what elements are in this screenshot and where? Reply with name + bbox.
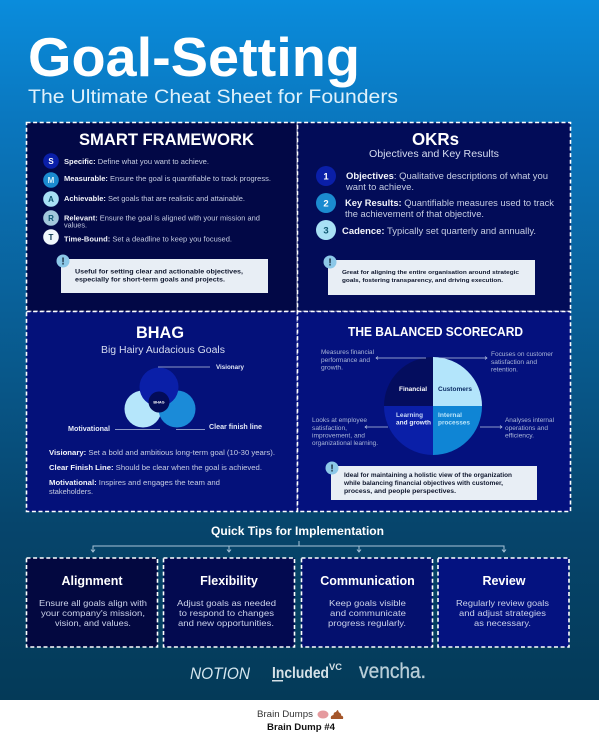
callout: balanced scorecard [326,462,537,500]
panel: review tip: Review [482,574,526,588]
footer: Brain Dump #4 [267,722,335,732]
icon: number 3: 3 [323,226,329,236]
panel: alignment tip: vision, and values. [55,618,131,628]
panel: review tip: as necessary. [474,618,531,628]
text: Key Results: the achievement of that objective. [345,209,484,219]
callout: SMART: Useful for setting clear and actionable objectives, [75,268,243,276]
text: Measurable: Measurable: Ensure the goal is quantifiable to track progress. [64,176,271,183]
panel: alignment tip [26,558,158,647]
heading: BHAG: BHAG [136,323,184,342]
icon: S badge [43,153,59,169]
pie chart: Internal [438,413,462,419]
panel: balanced scorecard [298,312,570,512]
text: Objectives: want to achieve. [345,182,414,192]
icon: T badge: T [49,233,54,242]
logo: Included VC: VC [329,662,343,672]
panel: alignment tip: Alignment [61,574,123,588]
callout: SMART: especially for short-term goals and projects. [75,277,225,284]
text: Specific: Specific: Define what you want to achieve. [64,159,209,166]
arrow: internal processes [480,426,502,428]
text: Relevant [64,216,260,230]
icon: M badge: M [48,176,55,185]
subheading: OKRs: Objectives and Key Results [369,149,499,160]
note: learning and growth: organizational learning. [312,440,378,447]
note: customers: satisfaction and [491,359,538,366]
callout: SMART: ! [61,256,65,268]
text: Cadence: Cadence: Typically set quarterly and annually. [342,226,536,236]
icon: M badge [43,172,59,188]
note: learning and growth: satisfaction, [312,425,347,432]
logo: Included VC: Included [272,665,329,682]
callout: balanced scorecard: ! [330,464,334,474]
logo: vencha: vencha. [359,660,426,683]
icon: brain [318,710,328,718]
note: customers: retention. [491,366,518,374]
panel: communication tip: progress regularly. [328,618,406,628]
callout: OKRs: ! [328,258,332,268]
subtitle: The Ultimate Cheat Sheet for Founders [28,86,398,108]
note: financial: performance and [321,357,371,364]
text: Motivational: stakeholders. [49,489,93,496]
subheading: BHAG: Big Hairy Audacious Goals [101,345,225,356]
arrow: learning and growth [365,426,388,428]
panel: flexibility tip [164,558,294,647]
title: Goal-Setting [28,26,360,88]
callout: SMART [56,254,268,293]
text: Motivational: Motivational: Inspires and engages the team and [49,480,220,487]
icon: R badge: R [48,214,54,223]
note: learning and growth: improvement, and [312,432,366,440]
icon: A badge [43,191,59,207]
panel: communication tip: Keep goals visible [329,598,406,608]
panel: alignment tip: your company's mission, [41,608,145,618]
note: internal processes: efficiency. [505,432,534,440]
text: Key Results [345,198,555,219]
panel: review tip [438,558,569,647]
callout: OKRs [324,256,535,295]
pie chart [384,357,482,455]
arrow: financial [376,356,426,360]
pie chart: and growth [396,420,431,426]
icon: number 1 [316,166,336,186]
pie chart: Customers [438,387,473,393]
text: Key Results: Key Results: Quantifiable measures used to track [345,198,555,208]
icon: number 2: 2 [323,198,329,210]
note: financial: growth. [321,364,343,372]
pie chart: Financial [399,387,427,393]
panel: communication tip: and communicate [330,608,406,618]
panel: communication tip: Communication [320,574,415,588]
text: Time-Bound: Time-Bound: Set a deadline to keep you focused. [64,236,232,244]
panel: flexibility tip: and new opportunities. [178,618,274,628]
icon: A badge: A [48,195,54,204]
icon: number 1: 1 [323,172,329,182]
text: Objectives: Objectives : Qualitative descriptions of what you [346,171,548,181]
icon: poo [331,710,343,719]
label: Visionary: Visionary [216,365,245,371]
panel: flexibility tip: to respond to changes [179,608,274,618]
panel: flexibility tip: Flexibility [200,574,258,588]
panel: OKRs [298,122,570,312]
icon: number 3 [316,220,336,240]
text: Visionary: Visionary: Set a bold and ambitious long-term goal (10-30 years). [49,450,275,457]
heading: SMART framework: SMART FRAMEWORK [79,131,254,149]
panel: flexibility tip: Adjust goals as needed [177,598,276,608]
note: customers: Focuses on customer [491,351,553,358]
label: Motivational: Motivational [68,426,110,433]
heading: balanced scorecard: THE BALANCED SCORECARD [348,325,523,339]
panel: SMART framework [26,122,298,312]
panel: alignment tip: Ensure all goals align with [39,598,147,608]
note: learning and growth: Looks at employee [312,417,368,424]
heading: quick tips: Quick Tips for Implementation [211,526,384,538]
text: Clear Finish Line: Clear Finish Line: Should be clear when the goal is achieved. [49,465,262,472]
callout: OKRs: Great for aligning the entire organisation around strategic [342,270,520,276]
icon: number 2 [316,193,336,213]
panel: review tip: Regularly review goals [456,598,549,608]
text: Relevant: values. [64,222,87,230]
note: financial: Measures financial [321,349,374,356]
icon: T badge [43,229,59,245]
text: Achievable: Achievable: Set goals that are realistic and attainable. [64,196,245,203]
logo: Notion: NOTION [190,664,251,683]
note: internal processes: Analyses internal [505,417,554,424]
arrows: tips bracket [91,541,506,552]
callout: balanced scorecard: Ideal for maintaining a holistic view of the organization [344,472,512,479]
note: internal processes: operations and [505,425,549,432]
text: Objectives [345,171,548,192]
heading: OKRs: OKRs [412,129,459,149]
callout: balanced scorecard: while balancing financial objectives with customer, [343,480,503,487]
icon: R badge [43,210,59,226]
arrow: customers [440,356,487,360]
text: Relevant: Relevant: Ensure the goal is aligned with your mission and [64,216,260,222]
callout: OKRs: goals, fostering transparency, and driving execution. [342,278,503,284]
icon: S badge: S [48,157,54,166]
note: internal processes [505,417,554,440]
venn diagram: BHAG [153,400,165,404]
panel: review tip: and adjust strategies [459,608,546,618]
note: learning and growth [312,417,378,447]
text: Motivational [49,480,220,496]
panel: BHAG [26,312,298,512]
panel: communication tip [302,558,432,647]
footer [0,700,599,741]
note: financial [321,349,374,372]
pie chart: Learning [396,413,423,419]
note: customers [491,351,553,374]
pie chart: processes [438,420,471,426]
callout: balanced scorecard: process, and people perspectives. [344,488,456,495]
venn diagram [115,367,210,430]
footer: Brain Dumps [257,709,314,719]
label: Clear finish line: Clear finish line [209,424,262,431]
